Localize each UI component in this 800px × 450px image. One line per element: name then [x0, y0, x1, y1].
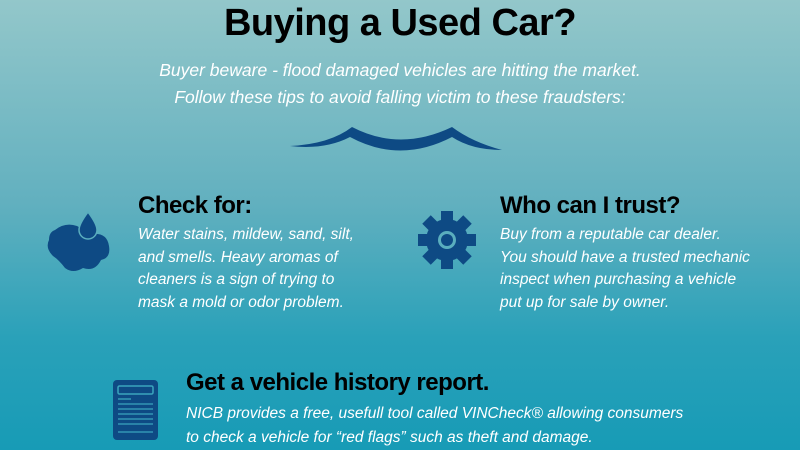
title: Buying a Used Car?	[224, 2, 576, 44]
heading: who can I trust: Who can I trust?	[500, 192, 680, 219]
text: vehicle history report: NICB provides a free, usefull tool called VINCheck® allowing consumers	[186, 405, 683, 422]
icon: water stain	[48, 214, 110, 271]
subtitle: Buyer beware - flood damaged vehicles are hitting the market.	[159, 60, 641, 80]
text: who can I trust: put up for sale by owner.	[500, 294, 669, 311]
text: vehicle history report	[186, 405, 683, 446]
text: who can I trust	[500, 226, 750, 311]
text: check for	[138, 226, 354, 311]
wave decoration	[290, 127, 502, 150]
subtitle: Follow these tips to avoid falling victim to these fraudsters:	[174, 87, 626, 107]
subtitle	[159, 60, 641, 107]
heading: vehicle history report: Get a vehicle history report.	[186, 369, 489, 396]
text: who can I trust: Buy from a reputable car dealer.	[500, 226, 721, 243]
text: who can I trust: inspect when purchasing a vehicle	[500, 271, 736, 288]
heading: check for: Check for:	[138, 192, 252, 219]
text: check for: Water stains, mildew, sand, silt,	[138, 226, 354, 243]
text: check for: cleaners is a sign of trying to	[138, 271, 334, 288]
icon: gear	[418, 211, 476, 269]
text: who can I trust: You should have a trusted mechanic	[500, 249, 750, 266]
text: check for: and smells. Heavy aromas of	[138, 249, 338, 266]
text: vehicle history report: to check a vehicle for “red flags” such as theft and damage.	[186, 429, 593, 446]
icon: document	[113, 380, 158, 440]
text: check for: mask a mold or odor problem.	[138, 294, 344, 311]
